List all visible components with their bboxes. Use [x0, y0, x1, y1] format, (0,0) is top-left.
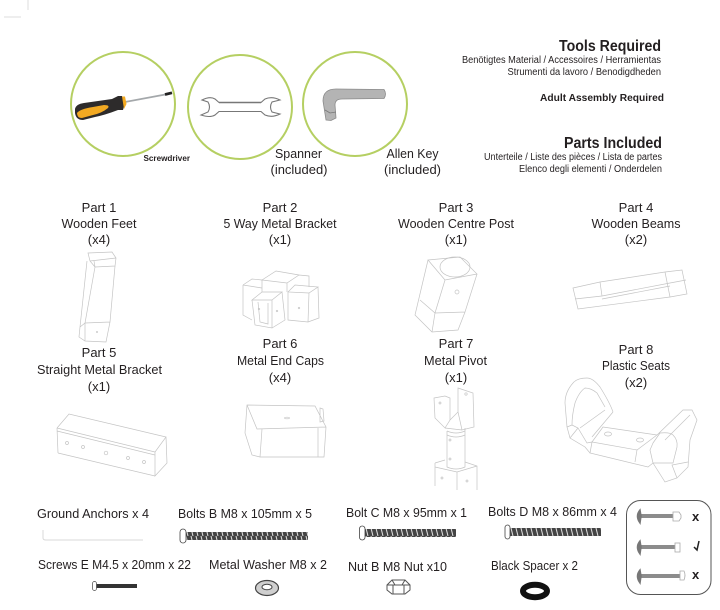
label: ground anchors: Ground Anchors x 4 [37, 506, 149, 521]
label: metal washer: Metal Washer M8 x 2 [209, 557, 327, 572]
part 2 label [224, 200, 337, 247]
heading: tools required: Strumenti da lavoro / Benodigdheden [508, 67, 661, 78]
label: allen key [384, 146, 441, 177]
part 7 drawing: metal pivot [434, 388, 477, 490]
part 6 label: Part 6 [263, 336, 297, 351]
label: screwdriver: Screwdriver [144, 154, 190, 163]
icon: bolt b [180, 529, 308, 543]
part 6 label: (x4) [269, 370, 291, 385]
heading: parts included [484, 135, 662, 175]
tool: allen key [303, 52, 407, 156]
panel: bolt length guide [626, 500, 711, 594]
heading: parts included: Elenco degli elementi / Onderdelen [519, 164, 662, 175]
tool: screwdriver [71, 52, 175, 156]
note: adult assembly: Adult Assembly Required [540, 92, 664, 104]
heading: tools required: Benötigtes Material / Accessoires / Herramientas [462, 55, 661, 66]
guide: bolt too short: x [692, 567, 700, 582]
icon: black spacer [523, 585, 547, 597]
part 4 label: (x2) [625, 232, 647, 247]
part 3 drawing: wooden centre post [415, 257, 477, 332]
part 4 label: Part 4 [619, 200, 653, 215]
label: allen key: (included) [384, 162, 441, 177]
part 8 drawing: plastic seats [565, 378, 697, 482]
part 5 label: Straight Metal Bracket [37, 362, 162, 377]
icon: bolt c [360, 526, 456, 540]
part 2 label: (x1) [269, 232, 291, 247]
label: screws e: Screws E M4.5 x 20mm x 22 [38, 557, 191, 572]
part 3 label: (x1) [445, 232, 467, 247]
part 1 label [62, 200, 137, 247]
label: spanner [270, 146, 328, 177]
part 5 drawing: straight metal bracket [57, 414, 167, 476]
guide: correct bolt [638, 541, 699, 554]
part 5 label: (x1) [88, 379, 110, 394]
part 6 drawing: metal end caps [245, 405, 326, 457]
label: nut b: Nut B M8 Nut x10 [348, 559, 447, 574]
part 2 drawing: 5 way metal bracket [243, 271, 319, 328]
part 3 label: Part 3 [439, 200, 473, 215]
part 7 label: Part 7 [439, 336, 473, 351]
part 4 label: Wooden Beams [592, 216, 681, 231]
part 3 label: Wooden Centre Post [398, 216, 514, 231]
heading: parts included: Parts Included [564, 135, 662, 152]
part 1 label: Part 1 [82, 200, 116, 215]
label: bolts b: Bolts B M8 x 105mm x 5 [178, 506, 312, 521]
part 7 label: Metal Pivot [424, 353, 487, 368]
label: black spacer: Black Spacer x 2 [491, 558, 578, 573]
part 8 label: Plastic Seats [602, 358, 670, 373]
label: bolt c: Bolt C M8 x 95mm x 1 [346, 505, 467, 520]
part 3 label [398, 200, 514, 247]
part 5 label [37, 345, 162, 394]
part 6 label: Metal End Caps [237, 353, 324, 368]
icon: ground anchor [43, 530, 143, 540]
tool: spanner [188, 55, 292, 159]
guide: bolt too long: x [692, 509, 700, 524]
icon: metal washer [256, 580, 278, 596]
part 8 label: Part 8 [619, 342, 653, 357]
heading: parts included: Unterteile / Liste des pièces / Lista de partes [484, 152, 662, 163]
part 8 label: (x2) [625, 375, 647, 390]
heading: tools required: Tools Required [559, 38, 661, 55]
part 2 label: 5 Way Metal Bracket [224, 216, 337, 231]
label: spanner: Spanner [275, 146, 323, 161]
label: allen key: Allen Key [386, 146, 439, 161]
part 7 label: (x1) [445, 370, 467, 385]
icon: screw e [92, 582, 137, 590]
part 5 label: Part 5 [82, 345, 116, 360]
icon: bolt d [505, 525, 601, 539]
label: spanner: (included) [270, 162, 328, 177]
part 2 label: Part 2 [263, 200, 297, 215]
part 1 label: (x4) [88, 232, 110, 247]
heading: tools required [462, 38, 661, 78]
part 6 label [237, 336, 324, 385]
icon: nut [387, 580, 410, 594]
label: bolts d: Bolts D M8 x 86mm x 4 [488, 504, 617, 519]
part 8 label [602, 342, 670, 390]
part 4 label [592, 200, 681, 247]
part 7 label [424, 336, 487, 385]
part 4 drawing: wooden beams [573, 270, 687, 309]
part 1 drawing: wooden feet [79, 252, 116, 342]
part 1 label: Wooden Feet [62, 216, 137, 231]
